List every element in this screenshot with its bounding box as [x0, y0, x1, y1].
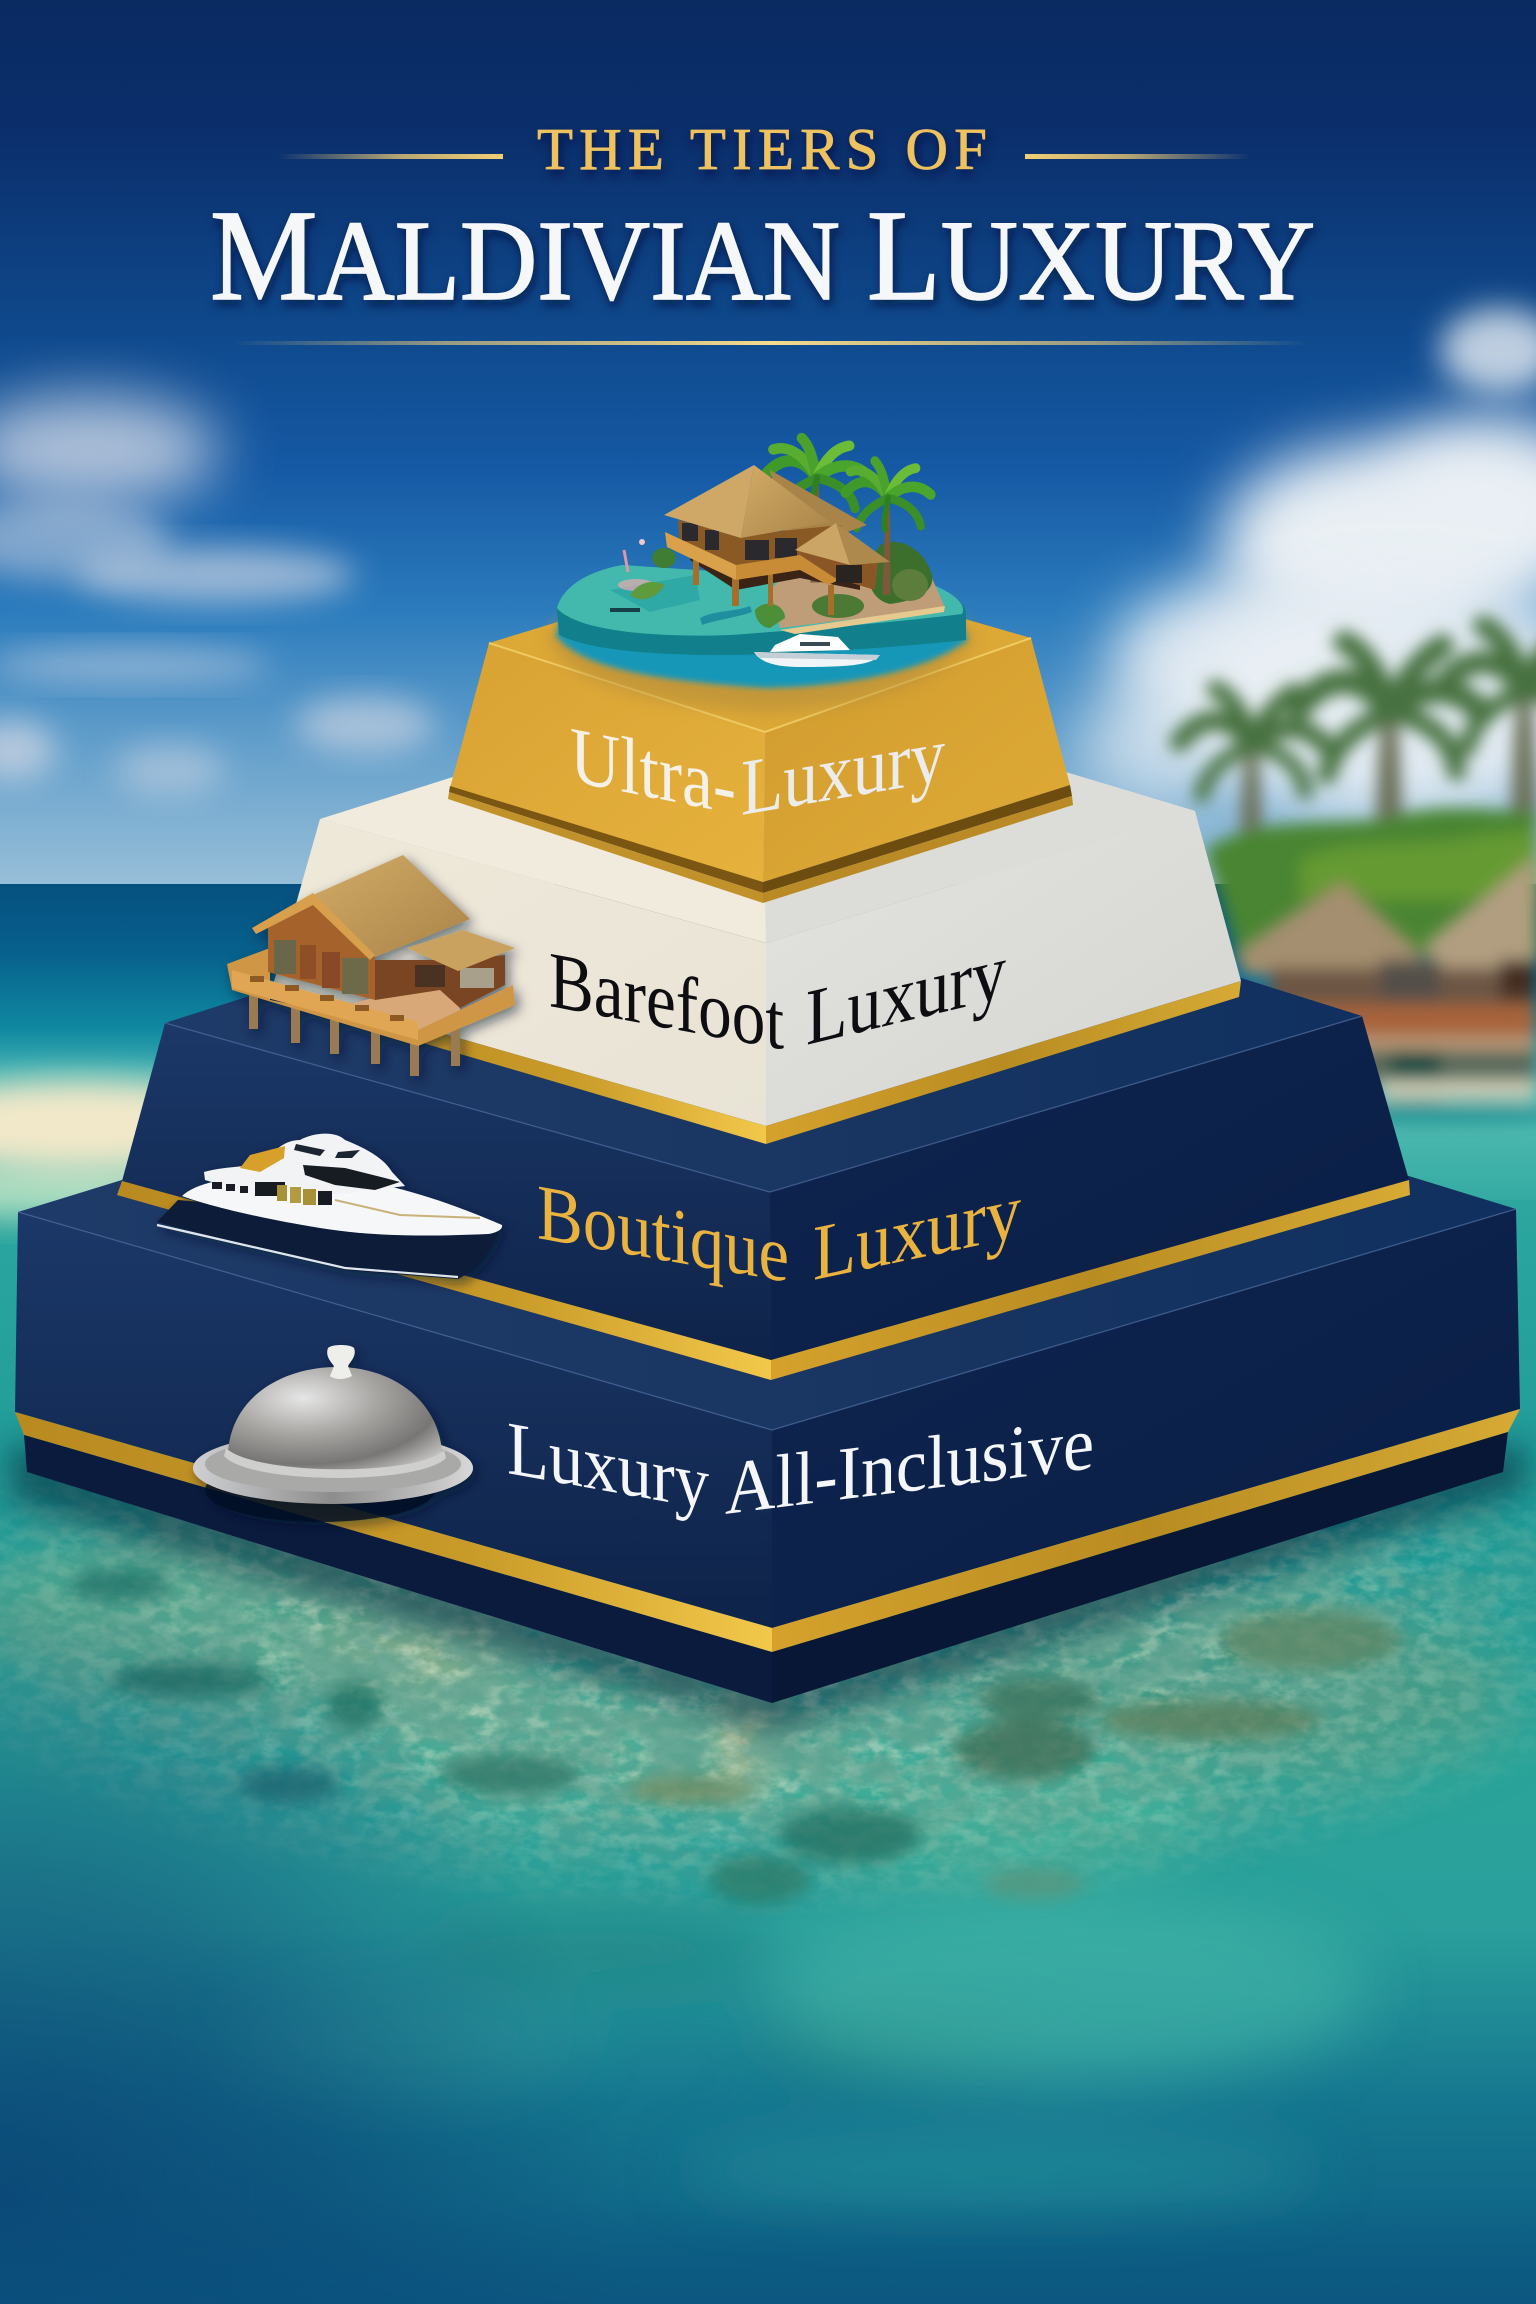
villa: windows — [682, 523, 797, 560]
icon: overwater bungalow — [227, 855, 515, 1076]
yacht: bridge windows — [303, 1165, 400, 1190]
villa: walls — [678, 520, 870, 572]
villa: posts — [693, 555, 834, 615]
tier label: Luxury All-Inclusive: All-Inclusive — [725, 1400, 1094, 1531]
title: eyebrow rule right — [1025, 154, 1250, 159]
tier label: Ultra-Luxury — [570, 710, 945, 833]
background: blurred palm island and huts — [1179, 626, 1536, 1125]
yacht: waterline stripes — [157, 1225, 458, 1277]
bungalow: wing roof — [407, 930, 515, 971]
tier label: Barefoot Luxury: Barefoot — [549, 936, 784, 1067]
title: underline rule — [230, 341, 1310, 345]
cloche: shadow — [205, 1458, 435, 1522]
background: reef patches in the lagoon — [0, 1380, 1536, 2304]
tier label: Barefoot Luxury — [549, 926, 1006, 1067]
island: base — [557, 567, 966, 655]
title: main heading: MALDIVIAN LUXURY — [210, 184, 1315, 328]
icon: private island resort — [548, 438, 976, 712]
tier 1: Ultra-Luxury gold block — [448, 560, 1073, 903]
tier label: Boutique Luxury: Luxury — [813, 1167, 1021, 1298]
icon: luxury yacht — [157, 1134, 502, 1279]
villa: small roof — [795, 523, 850, 565]
icon: silver cloche — [193, 1345, 473, 1522]
title: eyebrow text: THE TIERS OF — [537, 116, 987, 182]
villa: main roof back wing — [770, 470, 867, 552]
island: sand — [770, 560, 945, 628]
title block — [210, 116, 1315, 345]
cloche: dome — [228, 1367, 442, 1471]
villa: main roof — [664, 465, 754, 538]
tier 3: Boutique Luxury block — [117, 830, 1410, 1380]
bungalow: windows — [274, 940, 368, 994]
bungalow: main wall — [268, 897, 375, 1000]
yacht: hull — [157, 1200, 500, 1279]
tier label: Luxury All-Inclusive — [507, 1400, 1094, 1531]
yacht: deck rail — [335, 1200, 480, 1218]
island: foliage — [869, 542, 932, 604]
tier label: Luxury All-Inclusive: Luxury — [507, 1406, 709, 1526]
tier 4: Luxury All-Inclusive block — [15, 980, 1520, 1703]
title: eyebrow rule left — [278, 154, 503, 159]
villa: lower structure — [690, 530, 860, 590]
tier label: Boutique Luxury — [537, 1167, 1021, 1300]
cloche: rim — [224, 1448, 446, 1478]
tier label: Ultra-Luxury: Luxury — [741, 710, 945, 833]
yacht: cabin windows — [212, 1182, 332, 1205]
bungalow: railing — [232, 970, 418, 1040]
bungalow: stilts — [249, 995, 460, 1076]
yacht: white lower deck — [182, 1174, 502, 1236]
palm tree 1 — [768, 438, 866, 582]
island: pool and deck details — [610, 539, 785, 628]
island: soft gold fringe — [548, 620, 976, 712]
yacht: white upper decks — [204, 1134, 405, 1195]
background: sky — [0, 0, 1536, 900]
island: top surface — [557, 565, 963, 636]
tier 2: Barefoot Luxury block — [270, 680, 1241, 1144]
bungalow: wing wall — [375, 955, 505, 1008]
bungalow: deck floor — [227, 948, 515, 1046]
pyramid shadow on water — [10, 1440, 1526, 1730]
tier label: Boutique Luxury: Boutique — [537, 1169, 789, 1300]
cloche: tray — [193, 1432, 473, 1504]
villa: balcony rail — [665, 532, 736, 580]
villa: small wing wall — [800, 545, 878, 590]
bungalow: main roof — [313, 855, 470, 957]
cloche: knob — [327, 1345, 355, 1379]
tier label: Ultra-Luxury: Ultra- — [570, 711, 736, 832]
background: sea and sand — [0, 884, 1536, 2304]
tier label: Barefoot Luxury: Luxury — [806, 926, 1006, 1063]
island: surrounding water — [556, 620, 968, 688]
yacht: gold sun deck — [240, 1146, 285, 1172]
yacht on lagoon — [754, 634, 880, 667]
palm tree 2 — [845, 461, 931, 595]
